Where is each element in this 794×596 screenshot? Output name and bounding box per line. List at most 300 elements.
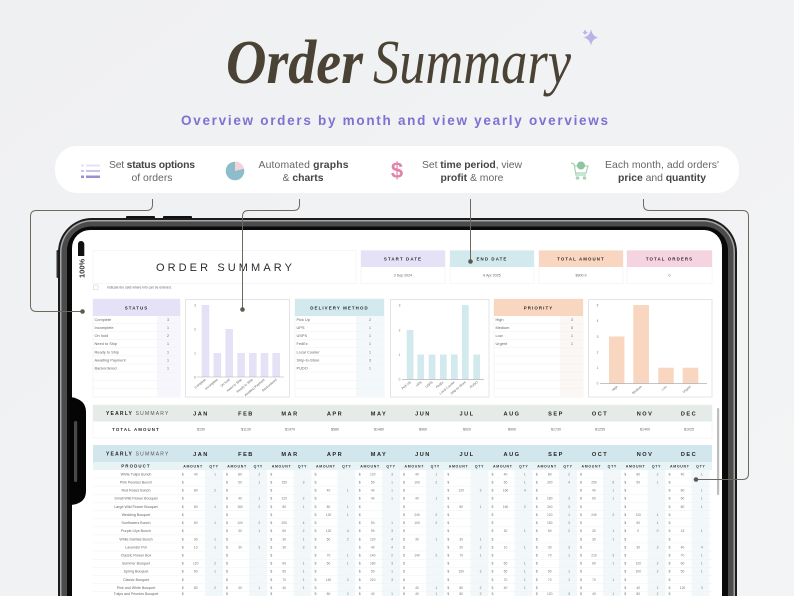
panel: priority table: Urgent — [496, 341, 508, 346]
icon: pie chart — [226, 162, 244, 180]
table values: 40 — [238, 497, 242, 501]
table values: 1 — [303, 537, 305, 541]
table values: 2 — [612, 513, 614, 517]
panel: status table: 1 — [167, 326, 169, 330]
chart: delivery bars: 1 — [399, 353, 401, 357]
table values: 2 — [391, 554, 393, 558]
table values: 4 — [524, 488, 526, 492]
chart: priority bars: Low — [661, 384, 668, 392]
chart: delivery bars: Local Courier — [439, 380, 456, 395]
table values: 120 — [680, 586, 685, 590]
table values: 2 — [303, 529, 305, 533]
panel: yearly summary totals: $580 — [331, 428, 339, 432]
table values: 3 — [568, 521, 570, 525]
panel: status table: 1 — [167, 342, 169, 346]
table values: 1 — [612, 562, 614, 566]
table values: 100 — [414, 521, 420, 525]
table values: 4 — [347, 529, 349, 533]
table values: 50 — [504, 480, 507, 484]
text: status options: of orders — [131, 173, 173, 184]
dollar signs: $$$$$$$$$$$$ — [182, 554, 670, 558]
table values: 2 — [568, 529, 570, 533]
table values: 50 — [194, 570, 198, 574]
table values: 2 — [435, 480, 437, 484]
table values: 1 — [435, 472, 437, 476]
table values: 2 — [480, 545, 482, 549]
title: Summary — [373, 29, 571, 97]
panel: yearly product table: QTY — [696, 464, 705, 468]
panel: yearly summary totals: SEP — [548, 412, 564, 418]
panel: delivery method table: 1 — [369, 350, 371, 354]
panel: yearly product table: MAY — [371, 452, 387, 458]
table values: 60 — [282, 529, 286, 533]
table values: 1 — [435, 537, 437, 541]
panel: delivery method table: 2 — [369, 318, 371, 322]
panel: yearly product table: AMOUNT — [626, 464, 645, 468]
scrollbar — [717, 408, 719, 495]
table values: 1 — [701, 488, 703, 492]
panel: yearly summary totals: MAR — [281, 412, 299, 418]
table values: 4 — [391, 537, 393, 541]
panel: yearly product table: QTY — [608, 464, 617, 468]
table values: 70 — [592, 578, 596, 582]
panel: yearly summary totals: $1255 — [595, 428, 605, 432]
table values: 1 — [214, 570, 216, 574]
chart: status bars: 2 — [194, 328, 196, 332]
text: graphs and charts: & charts — [282, 173, 324, 184]
panel: yearly summary totals: DEC — [681, 412, 697, 418]
table values: 2 — [347, 578, 349, 582]
text: time period: Set time period, view — [422, 160, 522, 171]
table values: 3 — [480, 488, 482, 492]
table values: 120 — [635, 513, 641, 517]
table values: 180 — [547, 497, 553, 501]
table values: 80 — [238, 472, 242, 476]
table values: 100 — [635, 570, 641, 574]
table values: 1 — [701, 497, 703, 501]
table values: 1 — [657, 586, 659, 590]
panel: yearly product table: JUN — [415, 452, 431, 458]
panel: delivery method table: USPS — [296, 333, 307, 338]
table values: 30 — [548, 545, 552, 549]
product names: Red Roses Bunch — [122, 488, 150, 492]
table values: 3 — [568, 505, 570, 509]
panel: priority table: High — [496, 317, 504, 322]
table values: 3 — [258, 545, 260, 549]
table values: 2 — [258, 472, 260, 476]
table values: 4 — [391, 545, 393, 549]
table values: 1 — [701, 505, 703, 509]
table values: 2 — [657, 562, 659, 566]
table values: 60 — [592, 562, 596, 566]
card: start date: START DATE — [384, 256, 422, 262]
panel: yearly product table: FEB — [238, 452, 254, 458]
panel: yearly summary totals: $1130 — [241, 428, 251, 432]
panel: yearly summary totals: JUN — [415, 412, 431, 418]
table values: 30 — [194, 537, 198, 541]
icon: sparkle — [582, 29, 598, 46]
product names: Spring Bouquet — [124, 570, 148, 574]
table values: 80 — [636, 472, 640, 476]
table values: 1 — [657, 480, 659, 484]
heading: sheet title — [93, 250, 356, 284]
table values: 2 — [214, 488, 216, 492]
panel: yearly product table: PRODUCT — [121, 464, 151, 468]
table values: 140 — [414, 554, 420, 558]
table values: 40 — [327, 488, 330, 492]
panel: priority table: 3 — [571, 318, 573, 322]
panel: yearly product table: QTY — [209, 464, 219, 468]
card: total amount: $900.9 — [576, 274, 586, 278]
table values: 70 — [681, 554, 684, 558]
panel: delivery method table: DELIVERY METHOD — [310, 306, 369, 310]
table values: 50 — [504, 570, 507, 574]
table values: 80 — [282, 505, 286, 509]
table values: 50 — [194, 521, 198, 525]
callout: time period — [468, 199, 473, 264]
panel: yearly product table: SEP — [548, 452, 564, 458]
table values: 1 — [524, 586, 526, 590]
table values: 1 — [701, 529, 703, 533]
panel: yearly product table: AMOUNT — [405, 464, 424, 468]
dollar signs: $$$$$$$$$$$$ — [182, 521, 670, 525]
panel: status table — [93, 299, 180, 397]
panel: yearly product table: QTY — [475, 464, 484, 468]
table values: 240 — [591, 513, 597, 517]
dollar signs: $$$$$$$$$$$$ — [182, 480, 670, 484]
panel: status table: Ready to Ship — [94, 349, 119, 354]
panel: yearly product table: QTY — [652, 464, 661, 468]
table values: 40 — [415, 472, 419, 476]
panel: yearly product table: QTY — [342, 464, 351, 468]
table values: 2 — [435, 554, 437, 558]
chart: status bars — [186, 300, 290, 397]
table values: 80 — [194, 586, 198, 590]
dollar signs: $$$$$$$$$$$$ — [182, 472, 670, 476]
table values: 3 — [568, 545, 570, 549]
heading: sheet title: ORDER SUMMARY — [156, 262, 295, 274]
table values: 2 — [524, 505, 526, 509]
table values: 1 — [347, 513, 349, 517]
product names: Summer Bouquet — [122, 562, 150, 566]
table values: 250 — [591, 480, 597, 484]
table values: 60 — [327, 537, 330, 541]
table values: 80 — [194, 488, 198, 492]
card: total orders — [627, 250, 712, 284]
panel: status table: 3 — [167, 318, 169, 322]
table values: 2 — [303, 497, 305, 501]
product names: Purple Lilys Bunch — [121, 529, 151, 533]
chart: delivery bars — [390, 300, 489, 397]
chart: priority bars: 3 — [597, 335, 599, 339]
table values: 2 — [258, 521, 260, 525]
table values: 3 — [303, 480, 305, 484]
panel: status table: STATUS — [125, 306, 148, 310]
table values: 2 — [347, 537, 349, 541]
table values: 3 — [612, 554, 614, 558]
table values: 3 — [303, 545, 305, 549]
chart: priority bars — [588, 300, 712, 397]
panel: delivery method table: 1 — [369, 326, 371, 330]
panel: yearly summary totals: MAY — [371, 412, 387, 418]
table values: 50 — [371, 570, 375, 574]
table values: 120 — [547, 513, 553, 517]
panel: priority table: Low — [496, 333, 503, 338]
table values: 1 — [612, 497, 614, 501]
panel: yearly product table: AMOUNT — [537, 464, 557, 468]
table values: 1 — [701, 570, 703, 574]
table values: 70 — [504, 578, 507, 582]
table values: 1 — [701, 554, 703, 558]
panel: yearly summary totals: $900 — [508, 428, 516, 432]
table values: 150 — [547, 521, 553, 525]
table values: 2 — [480, 586, 482, 590]
table values: 30 — [636, 545, 640, 549]
table values: 1 — [480, 537, 482, 541]
table values: 1 — [214, 505, 216, 509]
card: total amount — [539, 250, 623, 284]
table values: 100 — [237, 521, 243, 525]
table values: 1 — [391, 570, 393, 574]
panel: yearly product table: AMOUNT — [582, 464, 601, 468]
panel: yearly summary totals: AUG — [504, 412, 520, 418]
table values: 60 — [504, 562, 507, 566]
text: price and quantity: price and quantity — [618, 173, 706, 184]
text: status options: Set status options — [109, 160, 195, 171]
table values: 1 — [347, 554, 349, 558]
table values: 1 — [524, 480, 526, 484]
table values: 40 — [371, 488, 375, 492]
table values: 40 — [681, 545, 684, 549]
text: price and quantity: Each month, add orders' — [605, 160, 719, 171]
product names: White Dahlias Bunch — [119, 537, 153, 541]
table values: 50 — [238, 480, 242, 484]
chart: status bars: Need to Ship — [226, 378, 243, 393]
table values: 120 — [458, 488, 464, 492]
tablet frame — [56, 216, 737, 596]
table values: 2 — [657, 472, 659, 476]
card: end date — [450, 250, 534, 284]
card: total amount: TOTAL AMOUNT — [557, 256, 605, 262]
dollar signs: $$$$$$$$$$$$ — [182, 578, 670, 582]
chart: delivery bars: FedEx — [435, 380, 445, 389]
table values: 2 — [214, 562, 216, 566]
table values: 80 — [459, 505, 463, 509]
panel: status table: 1 — [167, 358, 169, 362]
chart: delivery bars: 2 — [399, 328, 401, 332]
card: start date — [361, 250, 445, 284]
table values: 1 — [391, 480, 393, 484]
callout: graphs and charts — [240, 199, 300, 312]
chart: priority bars: High — [611, 385, 619, 392]
chart: status bars: Ready to Ship — [236, 378, 254, 394]
panel: yearly summary totals: JAN — [193, 412, 209, 418]
table values: 70 — [282, 578, 286, 582]
table values: 1 — [524, 578, 526, 582]
chart: status bars: 3 — [194, 304, 196, 308]
panel: status table: Awaiting Payment — [94, 357, 126, 362]
chart: delivery bars: Pick Up — [401, 380, 412, 390]
table values: 60 — [327, 562, 330, 566]
table values: 50 — [371, 480, 375, 484]
table values: 60 — [548, 529, 552, 533]
callout: status options — [30, 199, 152, 314]
table values: 40 — [371, 497, 375, 501]
table values: 160 — [237, 505, 243, 509]
panel: status table: 1 — [167, 350, 169, 354]
table values: 200 — [281, 521, 287, 525]
table values: 1 — [568, 578, 570, 582]
panel: status table: Backordered — [94, 366, 117, 370]
table values: 1 — [391, 497, 393, 501]
table values: 40 — [504, 586, 507, 590]
panel: yearly product table: APR — [327, 452, 343, 458]
table values: 30 — [504, 529, 507, 533]
panel: yearly product table: MAR — [281, 452, 299, 458]
table values: 120 — [326, 513, 331, 517]
table values: 140 — [326, 578, 331, 582]
table values: 1 — [435, 586, 437, 590]
table values: 120 — [326, 529, 331, 533]
table values: 1 — [214, 521, 216, 525]
dollar signs: $$$$$$$$$$$$ — [182, 586, 670, 590]
card: total orders: 0 — [668, 274, 670, 278]
panel: yearly summary totals: $1400 — [640, 428, 650, 432]
table values: 1 — [480, 554, 482, 558]
panel: yearly product table: QTY — [431, 464, 440, 468]
title — [226, 29, 571, 97]
table values: 1 — [214, 545, 216, 549]
table values: 40 — [194, 472, 198, 476]
table values: 70 — [459, 554, 463, 558]
table values: 80 — [327, 505, 330, 509]
table values: 60 — [282, 562, 286, 566]
table values: 1 — [214, 472, 216, 476]
icon: cart — [571, 162, 588, 179]
table values: 1 — [347, 562, 349, 566]
table values: 80 — [681, 505, 684, 509]
text: graphs and charts: Automated graphs — [258, 160, 348, 171]
table values: 30 — [459, 537, 463, 541]
table values: 120 — [635, 562, 641, 566]
table values: 120 — [370, 472, 376, 476]
card: total orders: TOTAL ORDERS — [646, 256, 693, 262]
table values: 160 — [503, 488, 508, 492]
panel: yearly product table: QTY — [386, 464, 396, 468]
panel: feature strip — [55, 146, 739, 193]
panel: yearly product table: DEC — [681, 452, 697, 458]
table values: 1 — [657, 513, 659, 517]
table values: 1 — [391, 521, 393, 525]
product names: Pink and White Bouquet — [117, 586, 155, 590]
chart: delivery bars: PUDO — [469, 380, 479, 389]
chart: status bars: Complete — [194, 378, 207, 390]
table values: 3 — [391, 529, 393, 533]
panel: priority table — [494, 299, 583, 397]
table values: 1 — [524, 472, 526, 476]
table values: 2 — [657, 570, 659, 574]
panel: yearly product table: QTY — [254, 464, 263, 468]
table values: 15 — [681, 529, 684, 533]
product names: Sunflowers Bunch — [122, 521, 150, 525]
table values: 120 — [193, 562, 199, 566]
table values: 4 — [701, 545, 703, 549]
table values: 2 — [214, 586, 216, 590]
panel: delivery method table — [295, 299, 384, 397]
panel: yearly product table: YEARLY SUMMARY — [106, 452, 170, 458]
panel: status table: 1 — [167, 366, 169, 370]
table values: 10 — [504, 545, 507, 549]
panel: status table: Incomplete — [94, 325, 114, 330]
panel: priority table: 5 — [571, 326, 573, 330]
panel: yearly product table: AMOUNT — [316, 464, 336, 468]
chart: status bars: 1 — [194, 352, 196, 356]
chart: delivery bars: 0 — [399, 378, 401, 382]
panel: yearly summary totals: JUL — [459, 412, 475, 418]
table values: 150 — [458, 570, 464, 574]
dollar signs: $$$$$$$$$$$$ — [182, 505, 670, 509]
table values: 90 — [371, 529, 375, 533]
table values: 80 — [548, 472, 552, 476]
table values: 1 — [347, 505, 349, 509]
text: time period: profit & more — [441, 173, 503, 184]
chart: priority bars: 0 — [597, 382, 599, 386]
table values: 3 — [701, 586, 703, 590]
panel: status table: Complete — [94, 317, 111, 322]
table values: 3 — [568, 497, 570, 501]
title: Order — [226, 29, 364, 97]
icon: status list — [81, 164, 100, 178]
table values: 50 — [681, 570, 684, 574]
legend note: Indicate the cells where info can be entered. — [107, 286, 172, 290]
chart: status bars: On hold — [220, 378, 231, 388]
panel: yearly product table: QTY — [519, 464, 528, 468]
table values: 50 — [282, 570, 286, 574]
table values: 1 — [258, 497, 260, 501]
text: battery percent: 100% — [78, 258, 86, 278]
chart: delivery bars: UPS — [415, 380, 423, 387]
table values: 140 — [370, 554, 376, 558]
panel: yearly product table: AMOUNT — [360, 464, 380, 468]
table values: 200 — [547, 480, 553, 484]
table values: 40 — [415, 586, 419, 590]
dollar signs — [182, 472, 670, 596]
table values: 40 — [371, 545, 375, 549]
table values: 30 — [238, 529, 242, 533]
table values: 210 — [591, 554, 597, 558]
panel: status table: On hold — [94, 333, 108, 338]
product names: Large Wild Flower Bouquet — [114, 505, 158, 509]
table values: 60 — [592, 497, 596, 501]
panel: yearly product table: OCT — [592, 452, 608, 458]
table values: 30 — [592, 529, 596, 533]
panel: yearly summary totals — [93, 405, 712, 438]
table values: 60 — [681, 497, 684, 501]
table values: 1 — [303, 505, 305, 509]
table values: 1 — [303, 578, 305, 582]
table values: 40 — [681, 472, 684, 476]
table values: 1 — [524, 570, 526, 574]
table values: 20 — [459, 545, 463, 549]
chart: status bars: Awaiting Payment — [244, 378, 266, 397]
table values: 80 — [681, 488, 684, 492]
table values: 1 — [612, 537, 614, 541]
table values: 60 — [681, 562, 684, 566]
panel: yearly summary totals: YEARLY SUMMARY — [106, 411, 170, 417]
table values: 180 — [370, 562, 376, 566]
product names: Wedding Bouquet — [122, 513, 150, 517]
table values: 2 — [568, 472, 570, 476]
